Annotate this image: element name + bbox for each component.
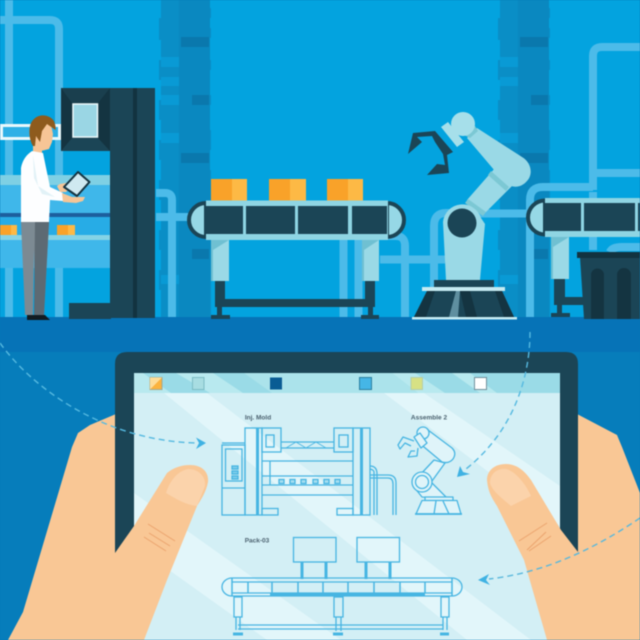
blueprint: packing conveyor: [222, 538, 462, 634]
dashed arrow left: [0, 343, 206, 449]
conveyor belt center: [189, 179, 404, 319]
conveyor legs: [211, 240, 379, 319]
dashed arrow right: [478, 518, 640, 585]
blueprint labels: Pack-03: [245, 538, 270, 544]
lower background: [0, 352, 640, 640]
factory wall background: [0, 0, 640, 320]
worker: [21, 115, 90, 320]
robot arm: [408, 112, 531, 320]
machine screen: [73, 104, 98, 137]
knuckle creases: [144, 523, 551, 551]
screen: [134, 373, 560, 640]
brick column left: [159, 0, 211, 318]
white frame behind worker: [2, 126, 60, 138]
blueprint labels: Inj. Mold: [245, 414, 271, 422]
floor: [0, 317, 640, 353]
dashed arrow top right: [457, 332, 530, 477]
conveyor belt right: [528, 198, 640, 317]
right hand palm: [540, 414, 640, 640]
thumbnails: [166, 469, 531, 506]
gripper: [408, 131, 453, 175]
screen glare stripes: [134, 393, 560, 640]
background pipes: [0, 0, 640, 318]
screen toolbar: [134, 373, 560, 393]
boxes: [211, 179, 363, 200]
machine column: [61, 88, 155, 319]
left hand palm: [8, 414, 160, 640]
brick column right: [498, 0, 550, 318]
blueprint labels: Assemble 2: [411, 414, 447, 422]
conveyor ends: [189, 203, 404, 237]
right thumb: [487, 464, 640, 640]
blueprint labels: [245, 414, 447, 544]
tablet: [115, 352, 578, 640]
blueprint: robot arm: [398, 427, 462, 514]
left shelving unit: [0, 175, 110, 268]
left thumb: [60, 465, 208, 640]
bin: [577, 252, 640, 319]
blueprint: injection mold machine: [222, 428, 396, 515]
worker tablet: [64, 172, 90, 196]
